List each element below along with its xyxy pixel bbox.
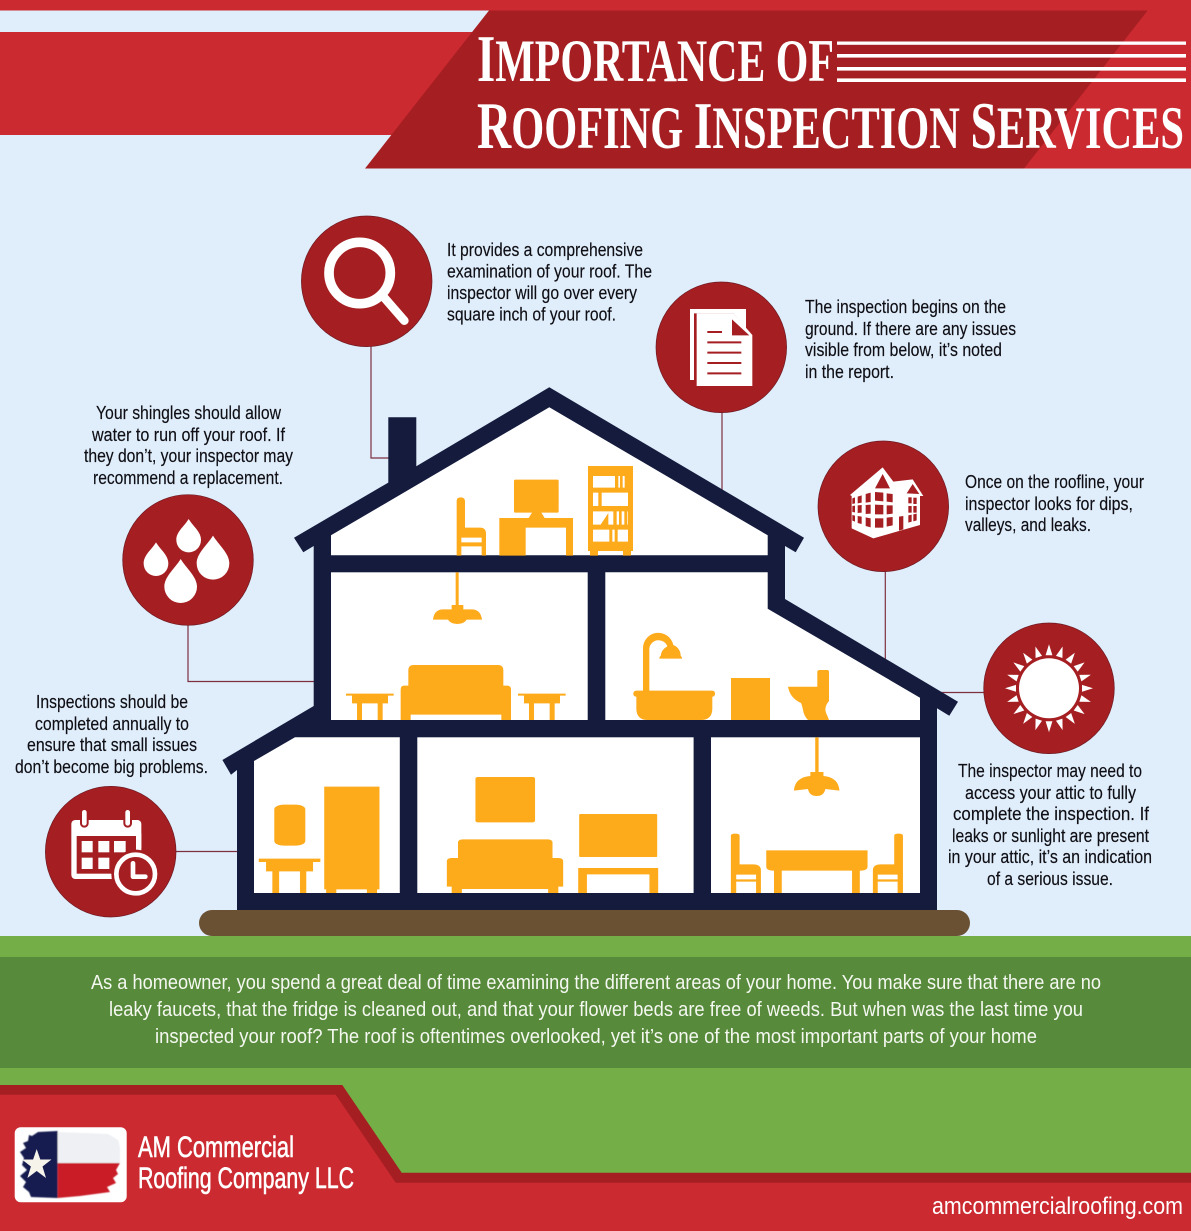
logo: Texas flag [15,1127,127,1202]
pendant lamp [433,572,482,624]
left side table [346,694,394,720]
text: begins on the ground: ground. If there are any issues [805,319,1016,339]
wardrobe [324,787,379,893]
toilet [788,670,829,720]
text: access your attic: complete the inspection. If [953,804,1150,824]
text: roofline dips: Once on the roofline, your [965,472,1144,492]
text: begins on the ground [805,297,1016,382]
text: access your attic: access your attic to fully [965,783,1136,803]
text: access your attic: leaks or sunlight are present [952,826,1149,846]
dining table [766,850,868,893]
house structure [222,387,958,910]
television [579,814,657,857]
text: comprehensive examination [447,240,652,324]
icon: magnifying glass [301,216,432,347]
company name: AM Commercial [138,1131,294,1164]
text: annual inspections [15,692,208,777]
intro text band [0,957,1191,1068]
dining pendant lamp [794,737,839,796]
lower middle room [417,737,694,893]
text: begins on the ground: in the report. [805,362,894,382]
icon: calendar and clock [45,786,176,917]
icon: building [818,441,949,572]
tv stand [578,868,658,893]
text: annual inspections: don’t become big problems. [15,757,208,777]
lower right room [711,737,920,893]
text: shingles: recommend a replacement. [93,468,283,488]
bathroom furniture [633,633,829,720]
footer banner [0,1085,1191,1231]
lounge sofa [447,839,563,893]
bookshelf [588,466,633,556]
lower left room [254,737,400,893]
text: comprehensive examination: inspector will go over every [447,283,637,303]
company name: Roofing Company LLC [138,1162,354,1195]
right side table [518,694,566,720]
lawn [0,936,1191,1181]
text: comprehensive examination: examination of your roof. The [447,262,652,282]
connector lines [176,346,985,852]
intro text band: leaky faucets, that the fridge is cleaned out, and that your flower beds are free of weeds. But when was the last time you [109,998,1083,1021]
attic furniture [457,466,633,556]
attic room [331,407,768,555]
text: access your attic [948,761,1152,889]
right dining chair [873,834,903,893]
text: access your attic: The inspector may need to [958,761,1142,781]
console table [259,859,320,893]
text: begins on the ground: The inspection begins on the [805,297,1006,317]
upper left room [331,572,588,720]
text: annual inspections: ensure that small issues [27,735,197,755]
company name [138,1131,354,1195]
icon: water drops [123,495,253,625]
text: begins on the ground: visible from below, it’s noted [805,340,1002,360]
title [477,22,1184,163]
wall picture [475,777,535,822]
intro text band: inspected your roof? The roof is oftentimes overlooked, yet it’s one of the most important parts of your home [155,1025,1037,1048]
text: access your attic: of a serious issue. [987,869,1113,889]
cabinet [731,678,770,720]
header banner [0,0,1191,168]
desk [499,518,573,556]
bathtub and shower [633,633,715,720]
text: roofline dips: valleys, and leaks. [965,515,1091,535]
sofa [401,665,511,720]
chair [457,497,486,556]
title: IMPORTANCE OF [477,22,834,96]
upper left room furniture [346,572,566,720]
text: access your attic: in your attic, it’s an indication [948,847,1152,867]
text: shingles: water to run off your roof. If [91,425,286,445]
mirror [274,805,305,846]
text: roofline dips: inspector looks for dips, [965,494,1133,514]
text: shingles: Your shingles should allow [96,403,282,423]
text: annual inspections: Inspections should be [36,692,188,712]
text: roofline dips [965,472,1144,535]
lower floor furniture [259,737,903,893]
upper right room [605,572,920,720]
monitor [514,480,559,518]
text: shingles: they don’t, your inspector may [84,446,293,466]
text: shingles [84,403,293,488]
ground log [199,910,970,936]
text: comprehensive examination: square inch of your roof. [447,304,616,324]
icon: documents [656,282,787,413]
text: annual inspections: completed annually to [35,714,189,734]
left dining chair [731,834,761,893]
title stripes [837,42,1186,82]
text: comprehensive examination: It provides a comprehensive [447,240,643,260]
icon: sun [984,623,1114,754]
